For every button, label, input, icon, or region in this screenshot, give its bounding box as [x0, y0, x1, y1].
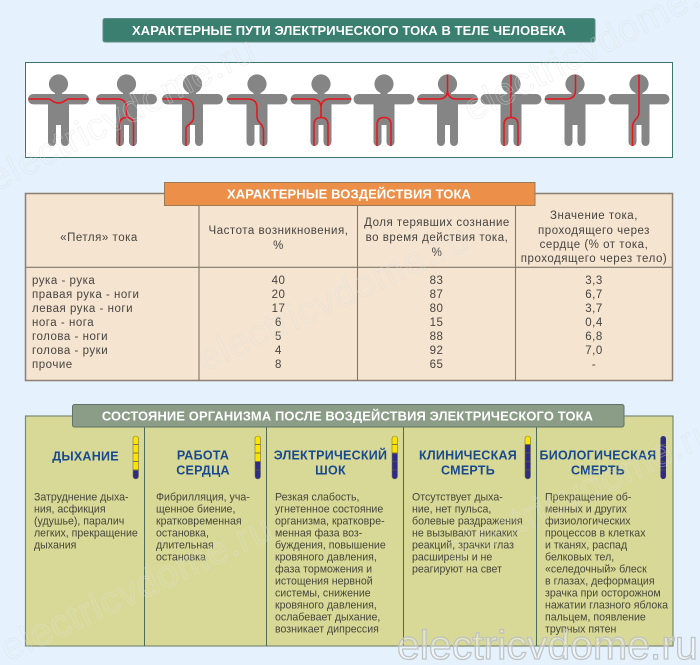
- table rows: прочие: [32, 359, 73, 371]
- title bar: ХАРАКТЕРНЫЕ ПУТИ ЭЛЕКТРИЧЕСКОГО ТОКА В ТЕЛЕ ЧЕЛОВЕКА: [132, 23, 566, 38]
- column: clinical death: Отсутствует дыха-: [412, 492, 503, 504]
- column: biological death: белковых тел,: [545, 552, 614, 564]
- table rows: 80: [430, 303, 443, 315]
- column: electric shock: угнетенное состояние: [275, 504, 383, 516]
- table rows: правая рука - ноги: [32, 289, 139, 301]
- table rows: 92: [430, 345, 443, 357]
- panel: body condition after current exposure: [26, 404, 673, 646]
- column: biological death: СМЕРТЬ: [571, 464, 625, 478]
- column: electric shock: ШОК: [315, 464, 346, 478]
- column: clinical death: КЛИНИЧЕСКАЯ: [419, 448, 517, 462]
- figure: hand to other leg: [226, 74, 288, 146]
- figure: right hand to legs: [96, 74, 157, 146]
- column headers: проходящего через тело): [521, 253, 667, 265]
- table rows: 0,4: [585, 317, 603, 329]
- table rows: 7,0: [585, 345, 603, 357]
- column: clinical death: ние, нет пульса,: [412, 504, 491, 516]
- table rows: 83: [430, 275, 443, 287]
- column: biological death: БИОЛОГИЧЕСКАЯ: [540, 448, 656, 462]
- column: biological death: [540, 436, 668, 636]
- column: breathing: ДЫХАНИЕ: [52, 450, 119, 464]
- column: biological death: трупных пятен: [545, 624, 616, 636]
- column: electric shock: [274, 436, 398, 636]
- table rows: 17: [272, 303, 285, 315]
- column: breathing: ния, асфикция: [34, 504, 106, 516]
- column: heart: [156, 436, 260, 564]
- column: electric shock: системы, снижение: [275, 588, 371, 600]
- table rows: 3,7: [585, 303, 603, 315]
- column: heart: щенное биение,: [156, 504, 235, 516]
- column: biological death: «селедочный» блеск: [545, 564, 647, 576]
- column headers: %: [273, 240, 284, 252]
- column headers: [60, 210, 667, 265]
- section heading: [72, 404, 624, 427]
- table rows: 20: [272, 289, 285, 301]
- column: biological death: нажатии глазного яблока: [545, 600, 668, 612]
- column: breathing: [34, 436, 138, 552]
- table rows: нога - нога: [32, 317, 94, 329]
- column: electric shock: буждения, повышение: [275, 540, 386, 552]
- column: electric shock: истощения нервной: [275, 576, 373, 588]
- column: electric shock: возникает дипрессия: [275, 624, 379, 636]
- column headers: сердце (% от тока,: [540, 239, 648, 251]
- column: breathing: дыхания: [34, 540, 76, 552]
- table rows: 5: [275, 331, 282, 343]
- column: biological death: менных и других: [545, 504, 628, 516]
- column: clinical death: болевые раздражения: [412, 516, 523, 528]
- column: breathing: (удушье), паралич: [34, 516, 124, 528]
- column: electric shock: кровяного давления,: [275, 600, 377, 612]
- column: clinical death: не вызывают никаких: [412, 528, 518, 540]
- column: electric shock: Резкая слабость,: [275, 492, 360, 504]
- table rows: левая рука - ноги: [32, 303, 133, 315]
- column: heart: кратковременная: [156, 516, 242, 528]
- column: clinical death: реакций, зрачки глаз: [412, 540, 514, 552]
- column: clinical death: СМЕРТЬ: [441, 464, 495, 478]
- table rows: 87: [430, 289, 443, 301]
- column: biological death: и тканях, распад: [545, 540, 627, 552]
- table heading: [164, 182, 535, 206]
- figure: head to legs: [480, 74, 542, 146]
- column: electric shock: менная фаза воз-: [275, 528, 363, 540]
- table rows: 65: [430, 359, 443, 371]
- column headers: во время действия тока,: [366, 232, 508, 244]
- table rows: 6,7: [585, 289, 603, 301]
- table rows: 40: [272, 275, 285, 287]
- table rows: 88: [430, 331, 443, 343]
- table rows: 6,8: [585, 331, 603, 343]
- table rows: [32, 275, 603, 371]
- column: electric shock: организма, кратковре-: [275, 516, 385, 528]
- column: electric shock: фаза торможения и: [275, 564, 372, 576]
- section heading: СОСТОЯНИЕ ОРГАНИЗМА ПОСЛЕ ВОЗДЕЙСТВИЯ ЭЛЕКТРИЧЕСКОГО ТОКА: [102, 408, 593, 424]
- panel: current effects table: [26, 182, 672, 380]
- figure: head to hand: [544, 74, 606, 146]
- column headers: Доля терявших сознание: [364, 217, 510, 229]
- figure: left hand to leg: [162, 74, 223, 146]
- column headers: «Петля» тока: [60, 232, 138, 244]
- table rows: 15: [430, 317, 443, 329]
- figure: both hands to legs: [290, 74, 352, 146]
- column: electric shock: кровяного давления,: [275, 552, 377, 564]
- watermarks: electricvdome.ru: [191, 218, 476, 380]
- column: biological death: Прекращение об-: [545, 492, 632, 504]
- column: biological death: зрачка при осторожном: [545, 588, 661, 600]
- figure: head to hands: [417, 74, 478, 146]
- column: electric shock: ЭЛЕКТРИЧЕСКИЙ: [274, 448, 387, 462]
- figure: hand to hand: [28, 74, 89, 146]
- column: electric shock: ослабевает дыхание,: [275, 612, 380, 624]
- meter: [525, 436, 530, 479]
- column headers: проходящего через: [538, 225, 650, 237]
- column: clinical death: реагируют на свет: [412, 564, 502, 576]
- panel: current paths through the human body: [26, 62, 672, 158]
- title bar: [103, 18, 595, 42]
- table rows: 6: [275, 317, 282, 329]
- column headers: Частота возникновения,: [209, 225, 348, 237]
- column: biological death: физиологических: [545, 516, 631, 528]
- meter: [660, 436, 666, 479]
- column headers: Значение тока,: [550, 210, 638, 222]
- table rows: 3,3: [585, 275, 603, 287]
- column: clinical death: расширены и не: [412, 552, 492, 564]
- column: heart: СЕРДЦА: [176, 464, 230, 478]
- table rows: рука - рука: [32, 275, 95, 287]
- figure: head to leg: [608, 74, 670, 146]
- table rows: голова - руки: [32, 345, 108, 357]
- table rows: голова - ноги: [32, 331, 108, 343]
- table heading: ХАРАКТЕРНЫЕ ВОЗДЕЙСТВИЯ ТОКА: [227, 186, 472, 202]
- column headers: %: [432, 247, 442, 259]
- column: breathing: Затруднение дыха-: [34, 492, 129, 504]
- column: heart: остановка,: [156, 528, 209, 540]
- meter: [255, 436, 260, 479]
- column: biological death: пальцем, появление: [545, 612, 646, 624]
- column: heart: остановка: [156, 552, 206, 564]
- column: heart: РАБОТА: [177, 448, 229, 462]
- column: clinical death: [412, 436, 530, 576]
- meter: [133, 436, 138, 479]
- table rows: 8: [275, 359, 282, 371]
- column: heart: длительная: [156, 540, 214, 552]
- figure: leg to leg: [354, 74, 414, 146]
- column: biological death: процессов в клетках: [545, 528, 646, 540]
- meter: [392, 436, 398, 479]
- column: heart: Фибрилляция, уча-: [156, 492, 250, 504]
- column: breathing: легких, прекращение: [34, 528, 138, 540]
- table rows: 4: [275, 345, 282, 357]
- column: biological death: в глазах, деформация: [545, 576, 655, 588]
- table rows: -: [592, 359, 596, 371]
